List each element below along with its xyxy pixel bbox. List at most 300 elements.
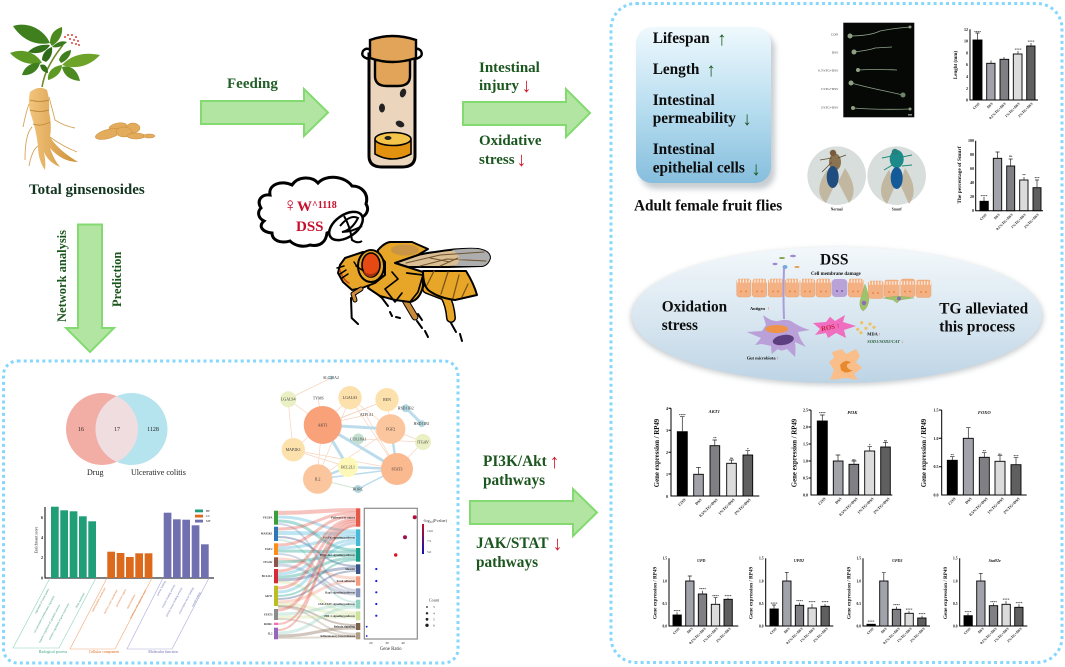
- card: phenotype summary: ↑: [706, 60, 716, 81]
- fly thorax and legs: [368, 242, 428, 302]
- bar chart: UPD2: 0.5%TG+DSS: [785, 627, 804, 645]
- bar chart: percentage of Smurf: DSS: [993, 213, 1001, 220]
- bar chart: PI3K: 2%TG+DSS: [872, 496, 891, 515]
- bar chart: FOXO: ***: [1013, 454, 1019, 458]
- network gene labels: SLC28A2: [323, 376, 339, 380]
- y axis label: Lenght (mm): Lenght (mm): [954, 51, 959, 79]
- bar chart: gut length: 8: [966, 50, 968, 55]
- bar chart: PI3K: CON: [817, 496, 827, 506]
- text: intestinal injury down: ↓: [522, 75, 532, 97]
- bar chart: UPD2: ****: [822, 600, 829, 604]
- bar chart: Stat92e: CON: [963, 627, 972, 635]
- bar chart: UPD2: ****: [796, 599, 803, 603]
- text: female W1118: ^1118: [312, 200, 337, 211]
- y axis label: Gene expression / RP49: [792, 418, 798, 487]
- bar chart: FOXO: 2%TG+DSS: [1002, 496, 1021, 515]
- bar chart: PI3K: ns: [852, 458, 856, 462]
- GO enrichment bar chart: membrane raft organelle outer: [129, 589, 147, 619]
- bar chart: FOXO: 0.5%TG+DSS: [968, 496, 989, 517]
- text: Oxidation stress: stress: [662, 317, 698, 334]
- card: phenotype summary: Lifespan: [653, 30, 710, 47]
- bar chart: UPD3: DSS: [880, 627, 888, 634]
- y axis label: Gene expression / RP49: [654, 418, 661, 487]
- color scale legend: -log: [423, 518, 430, 523]
- text: oxidative stress down: [479, 133, 542, 171]
- bar chart: UPD: 0.5: [662, 602, 667, 606]
- bar chart: FOXO: **: [951, 453, 954, 457]
- goblet nuclei: [862, 296, 901, 305]
- bar chart: Stat92e: 0.0: [953, 624, 958, 628]
- sankey gene labels: ITGAV: [263, 560, 273, 564]
- y axis label: Gene expression / RP49: [921, 418, 928, 487]
- arrow: pathways to right panel: [470, 489, 597, 536]
- micrograph group labels: DSS: [832, 50, 838, 54]
- network gene labels: AKT1: [318, 424, 328, 428]
- text: DSS: DSS: [296, 219, 324, 235]
- image: gut micrographs: [818, 23, 914, 117]
- bar chart: UPD3: CON: [866, 627, 875, 635]
- bar chart: PI3K: DSS: [834, 496, 843, 505]
- icon: red berries: [64, 34, 80, 46]
- bar chart: UPD2: [748, 556, 833, 645]
- y axis label: Gene expression / RP49: [846, 566, 852, 619]
- card: phenotype summary: Intestinal: [653, 92, 715, 109]
- sankey pathway labels: PI3K-Akt signaling pathway: [320, 553, 356, 557]
- bar chart: Stat92e: 0.5%TG+DSS: [979, 627, 998, 645]
- network gene labels: REN: [383, 398, 391, 402]
- title: UPD3: [892, 558, 902, 563]
- count legend: 4: [433, 612, 435, 616]
- bar chart: UPD: 1.0: [662, 580, 667, 584]
- sankey gene labels: IL2: [268, 632, 273, 636]
- bar chart: UPD3: 0.5: [856, 602, 861, 606]
- title: AKT1: [708, 409, 720, 414]
- count legend: 6: [433, 624, 435, 628]
- label: Antigen up: Antigen ↑: [750, 306, 770, 311]
- ellipse: oxidation stress mechanism: [631, 247, 1043, 385]
- panel: network pharmacology: [4, 361, 458, 663]
- bar chart: UPD: 0.5%TG+DSS: [688, 627, 707, 645]
- text: Oxidation stress: Oxidation: [662, 299, 728, 316]
- text: JAK/STAT pathways down: JAK/STAT: [476, 535, 548, 552]
- bar chart: AKT1: 1: [666, 472, 668, 477]
- text: JAK/STAT pathways down: ↓: [552, 533, 562, 555]
- bar chart: gut length: 0.5%TG+DSS: [988, 102, 1007, 120]
- bar chart: UPD2: 1.0: [759, 580, 764, 584]
- dendritic cell with antigen stem: [747, 268, 810, 357]
- bar chart: FOXO: 1.5: [934, 408, 938, 412]
- enrichment axes: [45, 507, 214, 578]
- bars: [817, 421, 890, 495]
- enrichment legend: BP: [206, 509, 210, 513]
- network strong edges: [318, 408, 422, 489]
- sankey gene labels: VEGFA: [263, 516, 273, 520]
- bar chart: UPD: [652, 556, 738, 645]
- bar chart: Stat92e: 2%TG+DSS: [1006, 627, 1023, 643]
- bar chart: gut length: 10: [964, 39, 968, 44]
- bar chart: percentage of Smurf: 60: [970, 166, 974, 171]
- bar chart: gut length: ****: [1015, 48, 1022, 52]
- bar chart: percentage of Smurf: 20: [970, 194, 974, 199]
- bar chart: percentage of Smurf: **: [1022, 173, 1026, 177]
- bar chart: Stat92e: ****: [1016, 601, 1023, 605]
- title: Total ginsenosides: Total ginsenosides: [29, 182, 145, 198]
- text: intestinal injury down: [479, 60, 540, 97]
- bar chart: percentage of Smurf: 40: [970, 180, 974, 185]
- bar chart: UPD: 1%TG+DSS: [702, 627, 719, 643]
- label: Gut microbiota up: Gut microbiota ↑: [747, 356, 779, 360]
- micrograph group labels: 1%TG+DSS: [821, 87, 838, 91]
- bars: [867, 581, 926, 626]
- bar chart: gut length: ****: [1028, 40, 1035, 44]
- text: TG alleviated this process: TG alleviated: [939, 300, 1029, 317]
- text: JAK/STAT pathways down: pathways: [476, 554, 538, 571]
- dot plot: gene ratio: [364, 508, 448, 652]
- venn diagram: [66, 393, 186, 477]
- venn label: Drug: Drug: [87, 468, 103, 477]
- GO enrichment bar chart: [13, 507, 214, 654]
- title: UPD2: [794, 558, 804, 563]
- epithelial cells row: [737, 279, 931, 298]
- PPI network: [280, 376, 431, 494]
- fly abdomen: [423, 271, 477, 300]
- GO enrichment bar chart: mitochondrion: [126, 594, 137, 609]
- network gene labels: ATP1A1: [360, 413, 374, 417]
- GO enrichment bar chart: protein binding: [156, 580, 167, 596]
- network gene labels: [281, 376, 430, 492]
- bar chart: percentage of Smurf: 80: [970, 152, 974, 157]
- bar chart: PI3K: 0.0: [803, 492, 808, 498]
- bars: [964, 581, 1023, 626]
- icon: ginseng root: [23, 88, 78, 170]
- bar chart: gut length: 2%TG+DSS: [1017, 102, 1034, 118]
- network thin edges: [288, 378, 423, 479]
- bar chart: PI3K: 0.5%TG+DSS: [838, 496, 859, 517]
- bar chart: Stat92e: 1%TG+DSS: [993, 627, 1010, 643]
- bar chart: UPD2: 0.5: [759, 602, 764, 606]
- bar chart: AKT1: **: [713, 436, 717, 440]
- arrow: feeding: [201, 89, 328, 136]
- sankey pathway bars: [356, 508, 360, 639]
- arrow: network prediction down: [66, 224, 114, 352]
- sankey pathway labels: Focal adhesion: [337, 579, 355, 583]
- bar chart: AKT1: 4: [666, 406, 668, 411]
- color scale legend: (Pvalue): [433, 518, 448, 523]
- title: UPD: [697, 558, 706, 563]
- bar chart: PI3K: 2.0: [803, 424, 808, 430]
- y axis label: Gene expression / RP49: [748, 566, 754, 619]
- text: intestinal injury down: injury: [479, 78, 519, 94]
- network gene labels: FGF2: [386, 428, 395, 432]
- card: phenotype summary: epithelial cells: [653, 160, 745, 177]
- MDA particles: [856, 321, 876, 334]
- network gene labels: ITGAV: [417, 440, 429, 444]
- enrichment legend: MF: [206, 519, 211, 523]
- burst: ROS: [813, 315, 856, 338]
- bar chart: percentage of Smurf: ns: [1009, 154, 1013, 158]
- axis label: Gene Ratio: Gene Ratio: [380, 647, 402, 652]
- bar chart: AKT1: 1%TG+DSS: [717, 497, 736, 516]
- bars: [770, 581, 829, 626]
- bar chart: UPD: ****: [725, 594, 732, 598]
- bar chart: AKT1: ****: [679, 413, 686, 417]
- color scale legend: 7.5: [427, 539, 432, 543]
- GO enrichment bar chart: negative regulation of apoptotic process: [38, 604, 61, 643]
- y axis label: Enrichment score: Enrichment score: [34, 526, 38, 553]
- network nodes: [280, 376, 431, 494]
- bar chart: percentage of Smurf: CON: [979, 213, 988, 221]
- bar chart: gut length: 12: [964, 27, 968, 32]
- bar chart: FOXO: ns: [998, 452, 1002, 456]
- label: Cell membrane damage: Cell membrane damage: [811, 272, 862, 277]
- bar chart: AKT1: *: [747, 447, 749, 451]
- bar chart: Stat92e: ****: [990, 600, 997, 604]
- GO enrichment bar chart: protein kinase binding activity: [165, 587, 184, 617]
- photo: smurf fly: [867, 146, 926, 212]
- network gene labels: HSD11B2: [398, 407, 414, 411]
- bar chart: UPD2: CON: [769, 627, 778, 635]
- bar chart: percentage of Smurf: ****: [981, 194, 988, 198]
- cellular component terms: [70, 578, 152, 649]
- card: phenotype summary: ↓: [751, 159, 761, 180]
- bar chart: UPD: ****: [699, 587, 706, 591]
- bars: [677, 432, 753, 496]
- bar chart: UPD3: ****: [893, 603, 900, 607]
- bar chart: FOXO: 0.0: [934, 492, 938, 498]
- bar chart: PI3K: ns: [884, 438, 888, 442]
- bar chart: percentage of Smurf: 2%TG+DSS: [1023, 213, 1040, 229]
- GO enrichment bar chart: steroid binding: [191, 591, 202, 607]
- bar chart: gut length: 6: [966, 62, 968, 67]
- sankey pathway labels: MAPK signaling pathway: [323, 536, 356, 540]
- bar chart: FOXO: 0.5: [934, 464, 938, 469]
- sankey flows: [278, 510, 356, 638]
- bar chart: UPD3: ****: [868, 620, 875, 624]
- bar chart: gut length: 4: [966, 74, 968, 79]
- macrophage: [829, 349, 862, 380]
- bar chart: AKT1: 0: [666, 494, 668, 499]
- MF bars: [164, 513, 209, 578]
- bar chart: UPD2: 2%TG+DSS: [812, 627, 829, 643]
- tube glass: [369, 54, 415, 167]
- bar chart: percentage of Smurf: 0.5%TG+DSS: [995, 213, 1014, 231]
- bar chart: AKT1: [654, 406, 759, 518]
- enrichment legend: [195, 509, 211, 523]
- network gene labels: STAT3: [392, 468, 403, 472]
- icon: fly culture tube: [362, 36, 422, 167]
- GO enrichment bar chart: mitochondrial membrane: [91, 586, 107, 612]
- floating antigens: [772, 255, 800, 269]
- panel: fruit fly experimental results: [611, 4, 1062, 662]
- sankey gene labels: AKT1: [265, 594, 273, 598]
- bar chart: Stat92e: [943, 556, 1027, 645]
- bar chart: UPD3: 1.0: [856, 580, 861, 584]
- network gene labels: BCL2L1: [341, 466, 355, 470]
- sankey gene labels: FGF2: [265, 547, 273, 551]
- bar chart: PI3K: *: [869, 443, 871, 447]
- bar chart: AKT1: 2%TG+DSS: [733, 497, 752, 516]
- bar chart: UPD2: 0.0: [759, 624, 764, 628]
- GO enrichment bar chart: 6: [41, 515, 43, 520]
- GO enrichment bar chart: perinuclear region: [115, 588, 127, 607]
- title: Stat92e: [989, 558, 1001, 563]
- smurf bars: [980, 158, 1041, 211]
- network gene labels: LGALS3: [343, 396, 357, 400]
- bar chart: UPD3: 0.0: [856, 624, 861, 628]
- color scale legend: [422, 518, 448, 554]
- GO enrichment bar chart: 4: [41, 535, 43, 540]
- network gene labels: LGALS4: [281, 398, 296, 402]
- network gene labels: TYMS: [313, 396, 324, 400]
- bar chart: Stat92e: 0.5: [953, 602, 958, 606]
- sankey pathway labels: [318, 516, 356, 638]
- network gene labels: HSD11B1: [414, 422, 430, 426]
- bar chart: UPD: 0.0: [662, 624, 667, 628]
- dot plot: gene ratio: 20: [369, 641, 373, 645]
- card: phenotype summary: ↑: [717, 29, 726, 50]
- label: Smurf: Smurf: [892, 208, 902, 212]
- bar chart: UPD3: 1%TG+DSS: [896, 627, 913, 643]
- y axis label: Gene expression / RP49: [943, 566, 949, 619]
- bar chart: gut length: 2: [966, 86, 968, 91]
- sankey pathway labels: Pathways in cancer: [331, 516, 356, 520]
- bar chart: gut length: [954, 27, 1038, 120]
- bar chart: UPD3: 0.5%TG+DSS: [882, 627, 901, 645]
- bar chart: AKT1: CON: [677, 497, 687, 507]
- bar chart: UPD3: ****: [919, 612, 926, 616]
- Sankey diagram: [261, 508, 360, 639]
- bar chart: PI3K: ****: [819, 411, 826, 415]
- arrow: to outcomes: [463, 89, 590, 137]
- text: PI3K/Akt pathways up: [483, 451, 560, 489]
- text: intestinal injury down: Intestinal: [479, 60, 540, 76]
- bar chart: UPD: 1.5: [662, 556, 667, 560]
- thought bubble: W1118 DSS: [259, 177, 368, 246]
- BP bars: [51, 507, 96, 578]
- bars: [673, 581, 732, 626]
- goblet cells: [860, 284, 914, 311]
- text: oxidative stress down: stress: [479, 152, 515, 168]
- enrichment legend: CC: [206, 514, 210, 518]
- bar chart: UPD2: DSS: [783, 627, 791, 634]
- network gene labels: MAP2K1: [286, 448, 301, 452]
- sankey pathway labels: Relaxin signaling: [334, 624, 356, 628]
- fly eye: [358, 250, 384, 282]
- icon: fruit fly: [337, 242, 490, 341]
- label: Normal: Normal: [831, 208, 843, 212]
- venn diagram: 1128: [147, 427, 159, 433]
- fly head: [338, 252, 385, 290]
- GO enrichment bar chart: enzyme binding activity: [161, 584, 176, 608]
- card: phenotype summary: permeability: [653, 110, 736, 127]
- molecular function terms: [127, 578, 209, 649]
- icon: ginseng leaves and stem: [10, 25, 100, 87]
- label: Feeding: Feeding: [227, 76, 278, 92]
- icon: ginseng plant with root and slices: [10, 25, 155, 170]
- burst: ROS: ROS ↑: [821, 323, 841, 333]
- bar chart: Stat92e: 1.0: [953, 580, 958, 584]
- text: PI3K/Akt pathways up: pathways: [483, 472, 545, 489]
- color scale legend: 10: [430, 520, 433, 524]
- y axis label: Gene expression / RP49: [652, 566, 658, 619]
- count legend: [425, 598, 440, 628]
- length bars: [973, 40, 1035, 100]
- bar chart: FOXO: CON: [947, 496, 957, 506]
- bar chart: AKT1: 0.5%TG+DSS: [698, 497, 719, 518]
- bar chart: FOXO: **: [983, 449, 986, 453]
- sankey gene labels: MAP2K1: [261, 532, 273, 536]
- text: oxidative stress down: Oxidative: [479, 133, 542, 149]
- text: TG alleviated this process: [939, 300, 1029, 336]
- text: oxidative stress down: ↓: [516, 149, 526, 171]
- text: female W1118: W: [297, 199, 312, 215]
- sankey pathway labels: JAK-STAT signaling pathway: [318, 602, 356, 606]
- bar chart: UPD: ****: [674, 609, 681, 613]
- bar chart: UPD2: 1%TG+DSS: [799, 627, 816, 643]
- color scale legend: 5.0: [427, 550, 432, 554]
- count legend: Count: [429, 598, 440, 602]
- GO enrichment bar chart: nucleus, outer membrane: [103, 588, 119, 614]
- micrograph group labels: CON: [831, 32, 839, 36]
- card: phenotype summary: [636, 27, 775, 189]
- bar chart: gut length: 0: [966, 98, 968, 102]
- card: phenotype summary: Intestinal: [653, 141, 715, 158]
- CC bars: [107, 552, 152, 578]
- bar chart: UPD3: 1.5: [856, 556, 861, 560]
- bar chart: UPD: CON: [672, 627, 681, 635]
- bar chart: Stat92e: 1.5: [953, 556, 958, 560]
- bar chart: AKT1: 2: [666, 450, 668, 455]
- bar chart: gut length: ****: [974, 30, 981, 34]
- bar chart: gut length: 1%TG+DSS: [1004, 102, 1021, 118]
- GO enrichment bar chart: transcription factor binding: [178, 587, 195, 614]
- sankey pathway labels: HIF-1 signaling pathway: [324, 614, 356, 618]
- heading: DSS: DSS: [820, 252, 848, 268]
- label: SOD1 SOD2 CAT down: SOD1/SOD2/CAT ↓: [867, 339, 903, 344]
- category label: Biological process: Biological process: [39, 650, 68, 654]
- sankey gene labels: RORC: [264, 622, 272, 626]
- bar chart: UPD3: ****: [906, 608, 913, 612]
- fly wing: [395, 249, 490, 267]
- bar chart: PI3K: 2.5: [803, 408, 808, 412]
- bar chart: Stat92e: ****: [965, 610, 972, 614]
- bar chart: FOXO: 1.0: [934, 436, 938, 441]
- bar chart: FOXO: DSS: [964, 496, 973, 505]
- bar chart: gut length: DSS: [986, 102, 994, 109]
- bar chart: percentage of Smurf: 100: [968, 138, 974, 143]
- panel border: right dashed: [611, 4, 1062, 662]
- bar chart: UPD2: 1.5: [759, 556, 764, 560]
- text: female W1118: ♀: [283, 195, 297, 216]
- venn diagram: 16: [78, 427, 84, 433]
- bars: [947, 438, 1021, 495]
- fly mouthparts: [353, 289, 361, 300]
- category label: Cellular component: Cellular component: [89, 650, 120, 654]
- text: TG alleviated this process: this process: [939, 319, 1015, 336]
- bar chart: UPD2: ****: [771, 602, 778, 606]
- bar chart: gut length: CON: [972, 102, 981, 110]
- caption: Adult female fruit flies: Adult female fruit flies: [634, 198, 782, 215]
- title: PI3K: [847, 410, 858, 415]
- GO enrichment bar chart: cell population proliferation regulation: [33, 595, 56, 633]
- bar chart: AKT1: DSS: [694, 497, 703, 506]
- sankey gene labels: STAT3: [264, 612, 273, 616]
- micrograph group labels: [818, 32, 839, 110]
- fly food: [375, 132, 411, 159]
- label: MDA up: MDA ↑: [867, 332, 881, 336]
- text: JAK/STAT pathways down: [476, 533, 562, 571]
- venn diagram: 17: [114, 427, 120, 433]
